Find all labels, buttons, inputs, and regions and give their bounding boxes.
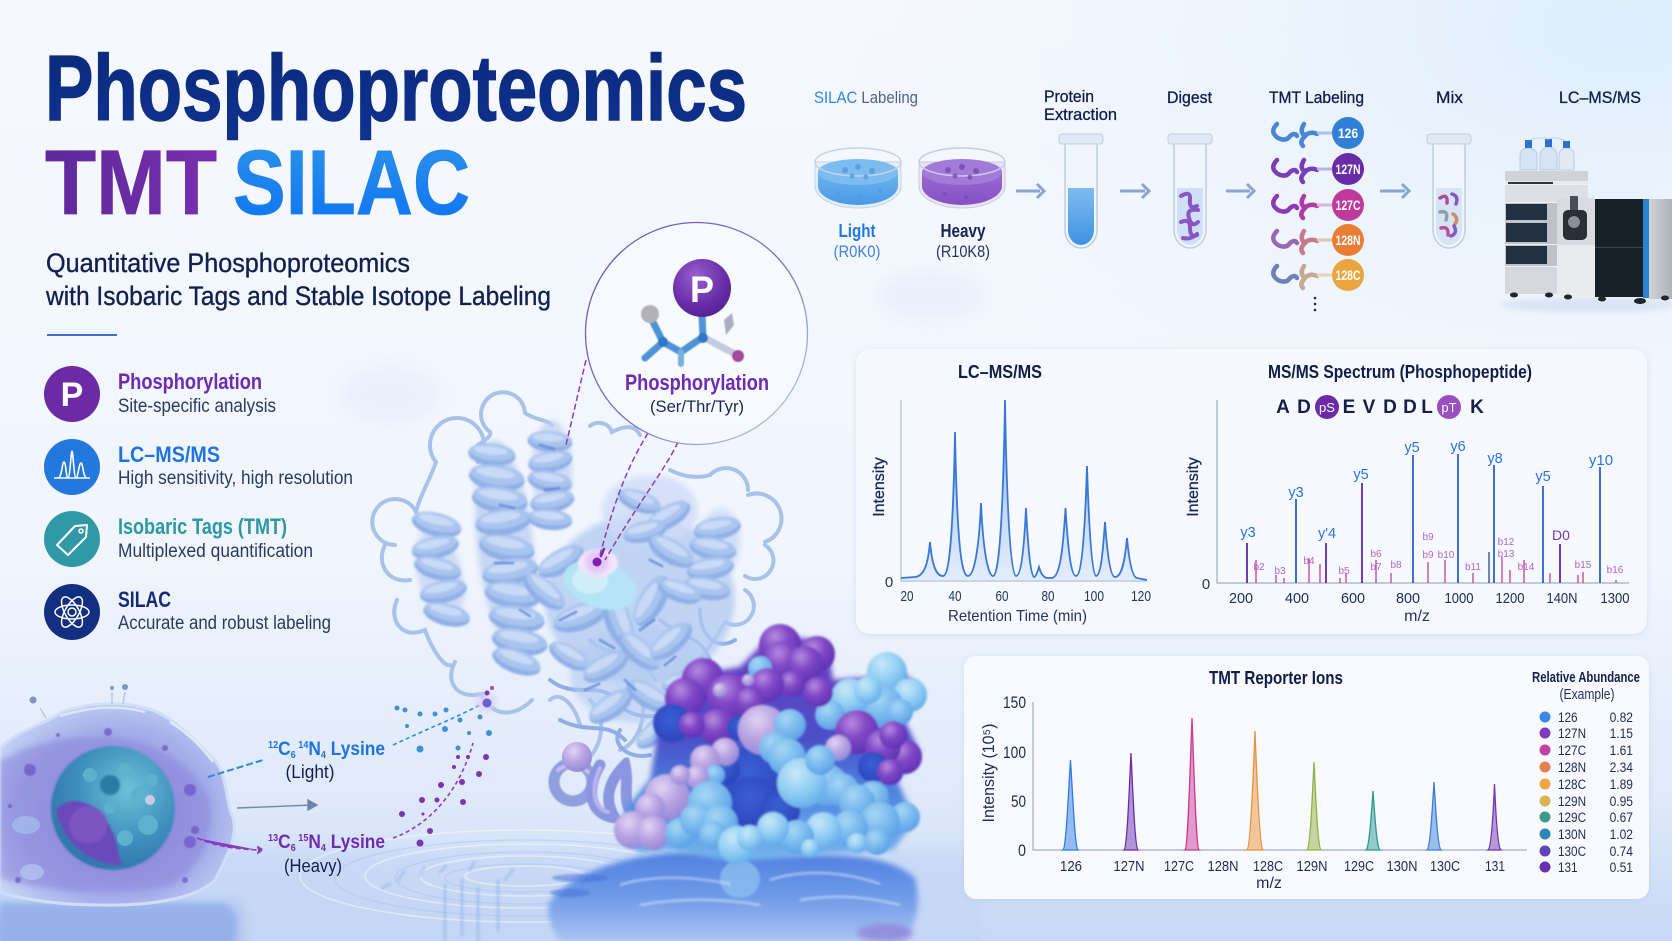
minor fragment peaks xyxy=(1256,552,1616,583)
relative abundance legend: 0.95 xyxy=(1610,793,1633,809)
phospho residue pS: pS xyxy=(1319,400,1335,415)
title: TMT xyxy=(45,132,217,234)
instrument feet xyxy=(1510,292,1669,304)
minor labels: b12 xyxy=(1498,537,1515,548)
cell droplets xyxy=(30,684,128,704)
central ribbons xyxy=(517,484,704,755)
feature list xyxy=(44,366,353,640)
peptide sequence: D xyxy=(1297,397,1311,418)
reporter ion chart: 128C xyxy=(1253,858,1283,875)
heavy lysine label xyxy=(268,832,385,876)
chromatogram chart: Retention Time (min) xyxy=(948,608,1087,625)
peptide sequence: D xyxy=(1403,397,1417,418)
arrow: cell to lysine xyxy=(237,800,317,810)
arrow: light lysine xyxy=(208,760,263,777)
minor labels: b13 xyxy=(1498,549,1515,560)
relative abundance legend: 2.34 xyxy=(1610,759,1633,775)
cell reflection xyxy=(0,903,236,941)
minor labels: b3 xyxy=(1274,566,1286,577)
relative abundance legend: 127N xyxy=(1558,725,1586,741)
reporter ion chart: 127C xyxy=(1164,858,1194,875)
background ribbon mass xyxy=(407,420,748,723)
spectrum chart: 0 xyxy=(1202,576,1210,593)
organelles xyxy=(8,728,199,883)
minor labels xyxy=(1253,532,1624,577)
minor labels: b11 xyxy=(1465,562,1481,573)
peptide sequence: E xyxy=(1343,397,1355,418)
fragment labels: y5 xyxy=(1535,469,1551,485)
ion source module xyxy=(1557,196,1595,296)
minor labels: b7 xyxy=(1370,562,1382,573)
heavy lysine label: 4 xyxy=(321,843,326,854)
cell body xyxy=(0,704,234,905)
fragment labels xyxy=(1240,439,1613,542)
reporter ion chart: m/z xyxy=(1256,875,1282,892)
heavy lysine label: (Heavy) xyxy=(284,856,342,876)
light lysine label: 14 xyxy=(298,740,309,751)
panel title: TMT Reporter Ions xyxy=(1209,668,1343,688)
relative abundance legend xyxy=(1532,669,1640,875)
reporter ion chart: 129N xyxy=(1296,858,1328,875)
subtitle: Quantitative Phosphoproteomics xyxy=(46,248,410,278)
spectrum chart: 200 xyxy=(1229,590,1253,607)
spectrum chart: 1300 xyxy=(1600,590,1630,607)
relative abundance legend: 128N xyxy=(1558,759,1586,775)
HPLC stack xyxy=(1505,171,1588,294)
tag 127N: 127N xyxy=(1336,162,1360,177)
light lysine label: (Light) xyxy=(286,762,334,782)
reporter ion chart xyxy=(979,693,1527,892)
protein reflection xyxy=(548,852,918,941)
panel: TMT reporter ions xyxy=(964,656,1649,899)
reporter ion chart: 130C xyxy=(1430,858,1460,875)
petri dish heavy xyxy=(919,148,1005,208)
petri dish light xyxy=(815,148,901,208)
spectrum chart: Intensity xyxy=(1185,457,1202,517)
spectrum chart: 400 xyxy=(1285,590,1309,607)
spectrum chart: 600 xyxy=(1341,590,1365,607)
solvent bottles xyxy=(1520,138,1574,170)
step headings xyxy=(814,87,1641,124)
dish labels xyxy=(834,221,990,261)
TMT tags xyxy=(1273,117,1364,311)
reporter ion chart: 0 xyxy=(1018,841,1026,860)
feature: silac: Accurate and robust labeling xyxy=(118,613,331,634)
tag 128N xyxy=(1273,224,1364,256)
dashed to protein blue xyxy=(393,705,480,745)
magnifier callout xyxy=(566,222,808,560)
feature: phosphorylation xyxy=(44,366,276,422)
minor labels: b16 xyxy=(1607,565,1624,576)
subtitle xyxy=(45,248,551,311)
feature: silac xyxy=(44,584,331,640)
phosphate molecule xyxy=(641,259,744,364)
relative abundance legend: 127C xyxy=(1558,742,1586,758)
step headings: TMT Labeling xyxy=(1269,88,1364,107)
more tags ellipsis xyxy=(1314,297,1316,311)
relative abundance legend: 1.02 xyxy=(1610,826,1633,842)
relative abundance legend: 129C xyxy=(1558,809,1586,825)
dish labels: (R10K8) xyxy=(936,242,990,261)
feature: phosphorylation: P xyxy=(61,376,83,414)
lysine entry point xyxy=(476,686,496,712)
phosphate molecule: P xyxy=(690,269,714,310)
reporter ion chart: 50 xyxy=(1011,792,1026,811)
spectrum chart: 800 xyxy=(1396,590,1420,607)
spectrum chart: m/z xyxy=(1404,608,1430,625)
alpha helix D xyxy=(681,514,743,604)
relative abundance legend: 130C xyxy=(1558,843,1586,859)
heavy lysine label: 6 xyxy=(291,843,296,854)
relative abundance legend: 0.82 xyxy=(1610,709,1633,725)
relative abundance legend: 0.51 xyxy=(1610,859,1633,875)
feature: isobaric tags: Multiplexed quantification xyxy=(118,541,313,562)
callout circle xyxy=(586,222,808,444)
tag 128N: 128N xyxy=(1336,233,1360,248)
feature: lc-ms/ms: LC–MS/MS xyxy=(118,442,220,467)
fragment labels: y5 xyxy=(1353,467,1369,483)
dangling ribbon helix xyxy=(554,763,635,818)
tag 127C: 127C xyxy=(1336,198,1361,213)
minor labels: b5 xyxy=(1338,566,1350,577)
ribbon loops xyxy=(372,392,781,762)
peptide sequence: K xyxy=(1470,397,1484,418)
water surface xyxy=(0,830,980,941)
step headings: Protein xyxy=(1044,87,1094,106)
purple particles xyxy=(399,754,489,846)
feature: isobaric tags: Isobaric Tags (TMT) xyxy=(118,514,287,539)
peptide sequence: L xyxy=(1421,397,1433,418)
light lysine label: 12 xyxy=(268,740,279,751)
lysine labels xyxy=(197,686,496,876)
relative abundance legend: 1.89 xyxy=(1610,776,1633,792)
dish labels: Heavy xyxy=(940,221,986,241)
step headings: Extraction xyxy=(1044,105,1117,124)
step headings: Digest xyxy=(1167,88,1212,107)
reporter ion chart: 131 xyxy=(1485,858,1505,875)
subtitle: with Isobaric Tags and Stable Isotope Labeling xyxy=(45,281,551,311)
minor labels: b9 xyxy=(1422,550,1434,561)
minor labels: b2 xyxy=(1253,562,1265,573)
relative abundance legend: 130N xyxy=(1558,826,1586,842)
relative abundance legend: (Example) xyxy=(1560,687,1614,703)
bright active site region xyxy=(557,549,643,619)
step headings: LC–MS/MS xyxy=(1559,88,1641,107)
tube: digest xyxy=(1168,134,1212,248)
dish labels: (R0K0) xyxy=(834,242,880,261)
reporter ion chart: 130N xyxy=(1386,858,1418,875)
heavy lysine label: Lysine xyxy=(326,832,385,853)
relative abundance legend: 0.74 xyxy=(1610,843,1633,859)
reporter ion chart: 126 xyxy=(1060,858,1082,875)
flow arrows xyxy=(1016,184,1409,198)
magnifier callout: (Ser/Thr/Tyr) xyxy=(650,397,744,416)
tag 127N xyxy=(1273,153,1364,185)
ribbon shadow details xyxy=(495,445,675,690)
chromatogram chart: 60 xyxy=(996,588,1008,605)
tag 128C: 128C xyxy=(1336,268,1361,283)
chromatogram chart: Intensity xyxy=(871,457,888,517)
space-filling protein xyxy=(614,624,927,864)
light lysine label: 4 xyxy=(321,750,326,761)
spectrum chart xyxy=(1185,395,1630,625)
chromatogram chart xyxy=(871,400,1151,625)
relative abundance legend: 126 xyxy=(1558,709,1578,725)
fragment labels: y8 xyxy=(1487,451,1503,467)
feature: silac: SILAC xyxy=(118,587,171,612)
LC-MS/MS instrument xyxy=(1500,138,1672,312)
fragment labels: y5 xyxy=(1404,440,1420,456)
fragment labels: y10 xyxy=(1589,452,1613,469)
panel titles xyxy=(958,362,1532,382)
peptide sequence: D xyxy=(1383,397,1397,418)
panel: LC-MS and spectrum xyxy=(856,349,1647,634)
tag 127C xyxy=(1273,189,1364,221)
fragment labels: y3 xyxy=(1240,525,1256,541)
minor labels: b9 xyxy=(1422,532,1434,543)
blue particles xyxy=(394,706,492,752)
fragment labels: y'4 xyxy=(1318,526,1336,542)
callout text: Phosphorylation xyxy=(625,370,769,395)
reporter ion chart: 150 xyxy=(1003,693,1026,712)
chromatogram chart: 40 xyxy=(948,588,962,605)
peptide sequence: A xyxy=(1276,397,1290,418)
relative abundance legend: 131 xyxy=(1558,859,1578,875)
feature: phosphorylation: Site-specific analysis xyxy=(118,396,276,417)
relative abundance legend: 1.15 xyxy=(1610,725,1633,741)
tube: mix xyxy=(1427,134,1471,248)
arrow: heavy lysine xyxy=(197,838,263,853)
heavy lysine label: N xyxy=(308,832,321,853)
phospho residue pS xyxy=(1315,395,1339,419)
light lysine label: C xyxy=(278,739,291,760)
spectrum chart: D0 xyxy=(1552,527,1570,543)
chromatogram chart: 80 xyxy=(1042,588,1054,605)
spectrum chart: 140N xyxy=(1546,590,1578,607)
light lysine label: 6 xyxy=(291,750,296,761)
relative abundance legend: 0.67 xyxy=(1610,809,1633,825)
reporter ion chart: 100 xyxy=(1003,743,1026,762)
panel background xyxy=(856,349,1647,634)
mass spectrometer xyxy=(1595,199,1672,299)
peptide sequence: V xyxy=(1363,397,1376,418)
spectrum chart: 1000 xyxy=(1444,590,1474,607)
protein ribbon structure xyxy=(372,392,781,818)
tag 126: 126 xyxy=(1338,126,1358,141)
feature: isobaric tags xyxy=(44,511,313,567)
minor labels: b10 xyxy=(1438,550,1455,561)
relative abundance legend: 1.61 xyxy=(1610,742,1633,758)
peptide sequence xyxy=(1276,397,1484,418)
nucleus xyxy=(51,746,175,870)
step headings: Mix xyxy=(1436,88,1463,107)
minor labels: b4 xyxy=(1303,556,1315,567)
callout leader lines xyxy=(566,360,678,560)
chromatogram chart: 100 xyxy=(1084,588,1104,605)
panel titles: MS/MS Spectrum (Phosphopeptide) xyxy=(1268,362,1532,382)
chromatogram chart: 0 xyxy=(885,574,893,591)
heavy lysine label: 13 xyxy=(268,833,279,844)
cell xyxy=(0,684,236,941)
feature: lc-ms/ms: High sensitivity, high resolution xyxy=(118,468,353,489)
mesh of thin ribbons xyxy=(550,610,735,756)
major fragment peaks xyxy=(1247,454,1600,583)
chromatogram chart: 20 xyxy=(900,588,914,605)
dish labels: Light xyxy=(838,221,876,241)
reporter peaks xyxy=(1063,718,1501,850)
alpha helix A xyxy=(467,441,549,681)
light lysine label: Lysine xyxy=(326,739,385,760)
reporter ion chart: Intensity (10⁵) xyxy=(979,724,998,822)
title: SILAC xyxy=(233,132,470,234)
relative abundance legend: Relative Abundance xyxy=(1532,669,1640,686)
minor labels: b6 xyxy=(1370,549,1382,560)
light lysine label xyxy=(268,739,385,782)
helices and ribbons xyxy=(409,430,743,755)
tube: protein extraction xyxy=(1059,134,1103,248)
spectrum chart: 1200 xyxy=(1496,590,1524,607)
divider xyxy=(47,334,117,336)
minor labels: b14 xyxy=(1518,562,1535,573)
fragment labels: y3 xyxy=(1288,485,1304,501)
reporter ion chart: 129C xyxy=(1344,858,1374,875)
step headings: SILAC Labeling xyxy=(814,88,918,107)
reporter ion chart: 128N xyxy=(1208,858,1238,875)
phospho residue pT xyxy=(1437,395,1461,419)
alpha helix B xyxy=(526,430,576,532)
tag 126 xyxy=(1273,117,1364,149)
minor labels: b15 xyxy=(1575,560,1592,571)
chromatogram chart: 120 xyxy=(1131,588,1151,605)
fragment labels: y6 xyxy=(1450,439,1466,455)
title xyxy=(45,36,747,234)
relative abundance legend: 128C xyxy=(1558,776,1586,792)
title: Phosphoproteomics xyxy=(45,36,747,140)
phospho site marker xyxy=(585,549,609,574)
tag 128C xyxy=(1273,259,1364,291)
panel background xyxy=(964,656,1649,899)
feature: lc-ms/ms xyxy=(44,439,353,495)
feature: phosphorylation: Phosphorylation xyxy=(118,369,262,394)
workflow xyxy=(814,87,1672,312)
alpha helix C xyxy=(409,507,472,631)
panel titles: LC–MS/MS xyxy=(958,362,1042,382)
reporter ion chart: 127N xyxy=(1114,858,1144,875)
heavy lysine label: 15 xyxy=(298,833,309,844)
relative abundance legend: 129N xyxy=(1558,793,1586,809)
minor labels: b8 xyxy=(1390,560,1402,571)
phospho residue pT: pT xyxy=(1441,400,1457,415)
heavy lysine label: C xyxy=(278,832,291,853)
light lysine label: N xyxy=(308,739,321,760)
dashed to protein purple xyxy=(393,743,473,838)
